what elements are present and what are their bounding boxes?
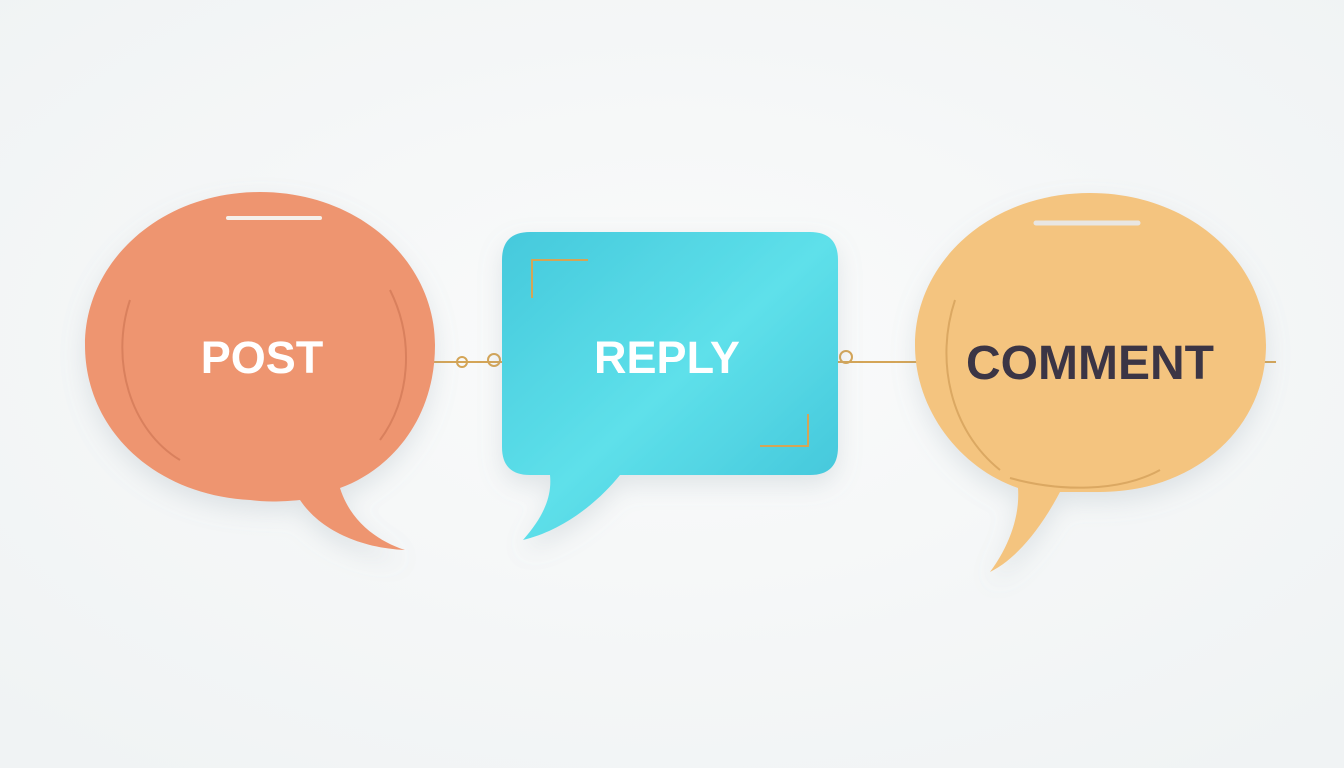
label: reply: REPLY [594,332,740,383]
bubble: comment [915,193,1266,572]
bubble: reply [502,232,838,540]
label: post: POST [201,332,323,383]
connectors [430,351,1276,367]
label: comment: COMMENT [966,337,1214,390]
bubble: post [85,192,435,550]
